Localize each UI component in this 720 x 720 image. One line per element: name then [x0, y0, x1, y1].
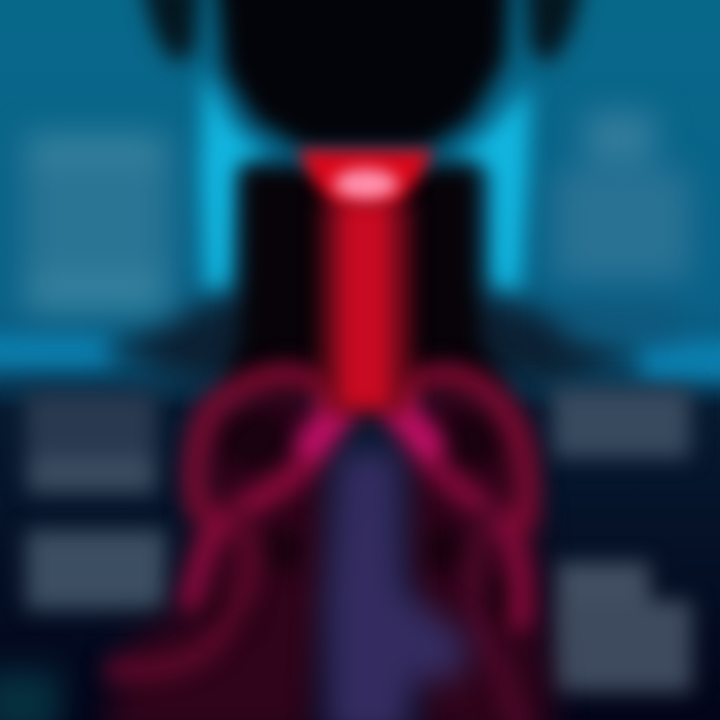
spine: [325, 450, 470, 720]
right lung dark cavities: [421, 412, 522, 626]
trachea: [322, 200, 410, 415]
panel: middle left text block: [26, 392, 156, 493]
head silhouette: [215, 0, 510, 150]
panel: upper left text block: [24, 135, 172, 315]
panel: upper right text block: [555, 112, 690, 340]
left lung mass: [105, 380, 330, 720]
throat glow: [298, 150, 434, 205]
ears: [140, 0, 585, 65]
left lung dark cavities: [197, 410, 307, 631]
panel: lower right text block: [552, 562, 692, 692]
cyan glow beside neck: [200, 70, 530, 295]
neck silhouette: [220, 165, 510, 400]
right lung mass: [405, 380, 555, 720]
lungs: [105, 375, 555, 720]
panel: middle right text block: [552, 388, 690, 458]
shoulders silhouette: [110, 295, 640, 385]
panel: lower left text block: [26, 530, 166, 610]
bronchial branches: [115, 375, 527, 720]
